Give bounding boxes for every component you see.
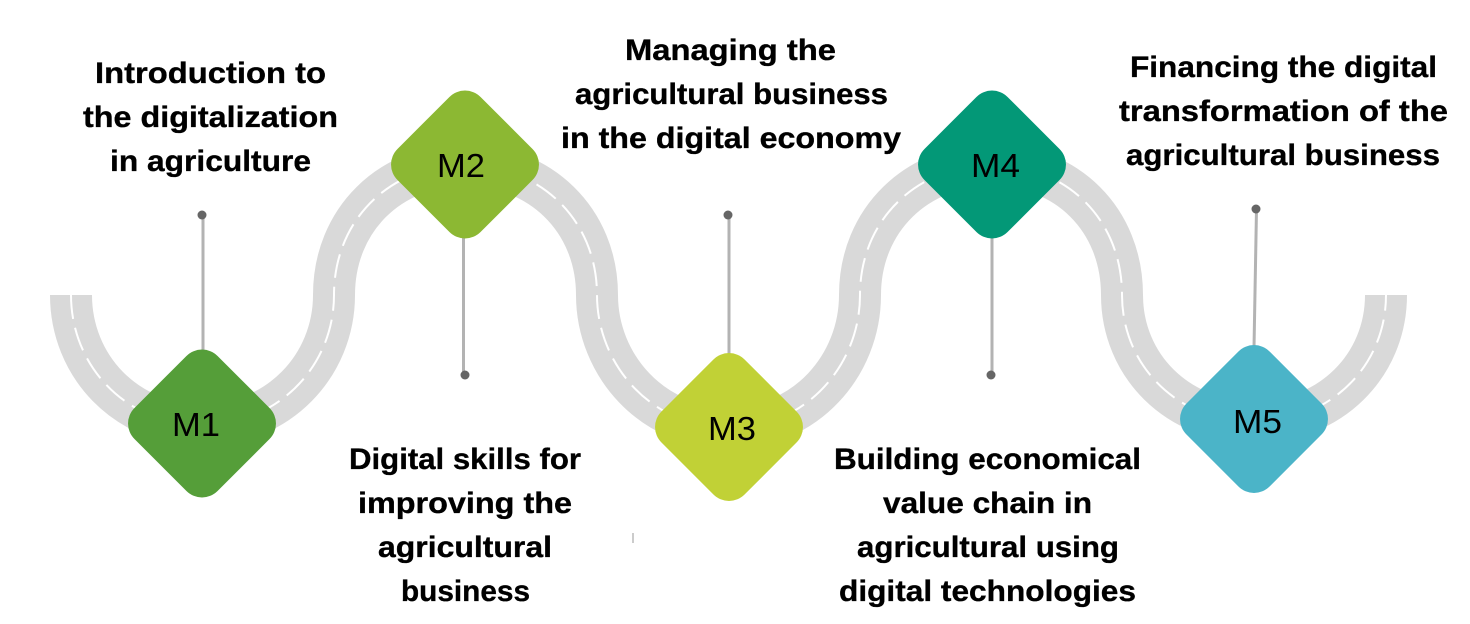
text: module 2 title: business [401, 575, 530, 608]
text: module 4 title: value chain in [883, 487, 1092, 520]
winding road [71, 165, 1386, 428]
connector M2 [460, 236, 470, 380]
text: module 5 title: Financing the digital [1130, 51, 1437, 84]
diamond M5: M5 [1233, 403, 1282, 440]
text: module 4 title: agricultural using [857, 531, 1119, 564]
connector M3 [724, 210, 732, 355]
diamond M5 [1171, 336, 1337, 502]
diamond M2 [382, 81, 548, 248]
text: module 4 title [834, 443, 1141, 608]
text: module 5 title: agricultural business [1126, 139, 1440, 172]
text: module 4 title: Building economical [834, 443, 1141, 476]
text: module 5 title: transformation of the [1119, 95, 1448, 128]
diamond M4: M4 [971, 147, 1020, 184]
text: module 5 title [1119, 51, 1448, 172]
diamond M2: M2 [437, 147, 485, 184]
text: module 3 title: in the digital economy [561, 122, 901, 155]
connector M1 [198, 210, 206, 352]
text: module 1 title: Introduction to [95, 57, 326, 90]
connector M4 [986, 236, 996, 380]
text: module 1 title: the digitalization [83, 101, 338, 134]
text: module 1 title [83, 57, 338, 178]
text: module 2 title: improving the [358, 487, 572, 520]
text: module 1 title: in agriculture [110, 145, 311, 178]
diamond M3: M3 [708, 410, 756, 447]
text: module 4 title: digital technologies [839, 575, 1136, 608]
text: module 2 title [349, 443, 581, 608]
diamond M1 [119, 340, 285, 507]
diamond M3 [646, 344, 812, 510]
connector M5 [1252, 204, 1260, 348]
text: module 3 title [561, 34, 901, 155]
diamond M4 [909, 81, 1075, 248]
diamond M1: M1 [172, 406, 220, 443]
text: module 3 title: Managing the [625, 34, 836, 67]
text: module 2 title: agricultural [378, 531, 552, 564]
text: module 3 title: agricultural business [575, 78, 888, 111]
text: module 2 title: Digital skills for [349, 443, 581, 476]
